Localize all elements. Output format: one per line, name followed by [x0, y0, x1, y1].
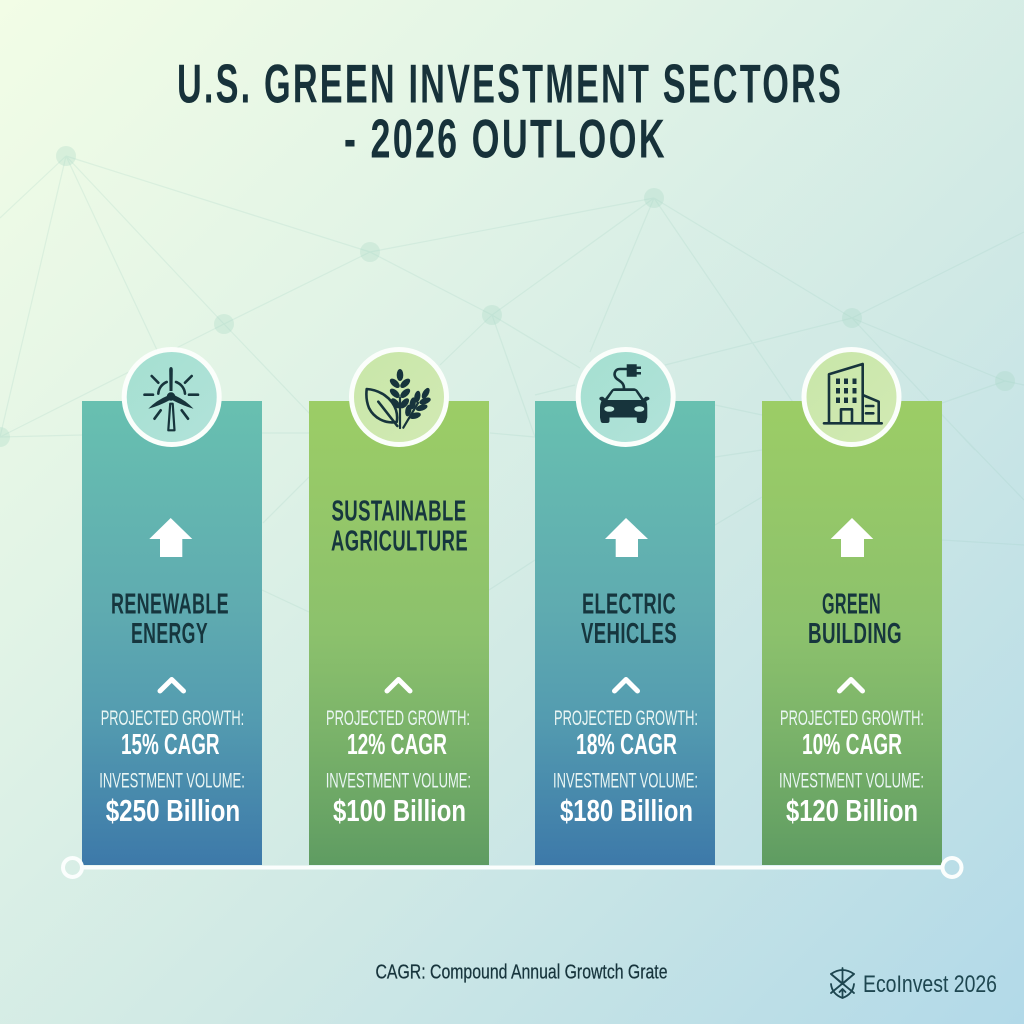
panel: renewable energy	[82, 350, 262, 865]
icon: wind turbine	[124, 350, 219, 444]
icon: brand mark	[831, 968, 854, 998]
chevron	[614, 680, 638, 691]
metrics: $100 Billion	[333, 793, 466, 828]
footnote: CAGR: Compound Annual Growtch Grate	[376, 962, 668, 984]
sector name	[808, 588, 902, 650]
metrics: PROJECTED GROWTH:	[554, 706, 698, 730]
sector name: GREEN	[822, 588, 881, 620]
metrics: PROJECTED GROWTH:	[780, 706, 924, 730]
metrics: 18% CAGR	[576, 729, 677, 761]
metrics	[326, 706, 471, 828]
sector name	[331, 496, 468, 558]
sector name: SUSTAINABLE	[332, 496, 466, 528]
metrics: INVESTMENT VOLUME:	[553, 768, 698, 792]
metrics: 10% CAGR	[802, 729, 902, 761]
panel: electric vehicles	[535, 350, 715, 865]
sector name	[581, 588, 677, 650]
metrics: INVESTMENT VOLUME:	[779, 768, 924, 792]
background network pattern	[0, 146, 1024, 612]
sector name: ENERGY	[131, 618, 208, 650]
metrics: PROJECTED GROWTH:	[101, 706, 244, 730]
sector name: BUILDING	[808, 618, 902, 650]
metrics	[99, 706, 245, 828]
metrics: 12% CAGR	[347, 729, 447, 761]
title: - 2026 OUTLOOK	[344, 108, 667, 170]
chevron	[160, 680, 184, 691]
arrow: up	[605, 518, 648, 557]
sector name: VEHICLES	[581, 618, 677, 650]
metrics: INVESTMENT VOLUME:	[99, 768, 245, 792]
arrow: up	[149, 518, 192, 557]
chevron	[840, 680, 862, 691]
sector name: ELECTRIC	[582, 588, 676, 620]
panel: sustainable agriculture	[309, 350, 489, 865]
metrics: INVESTMENT VOLUME:	[326, 768, 471, 792]
metrics	[779, 706, 924, 828]
chevron	[387, 680, 410, 691]
icon: electric car	[578, 350, 673, 444]
arrow: up	[831, 518, 873, 557]
metrics: 15% CAGR	[121, 729, 220, 761]
brand name: EcoInvest 2026	[863, 971, 997, 998]
timeline axis	[63, 858, 962, 877]
sector name: RENEWABLE	[111, 588, 229, 620]
sector name: AGRICULTURE	[331, 526, 468, 558]
metrics: $250 Billion	[106, 793, 240, 828]
title	[177, 52, 843, 170]
icon: leaf and wheat	[352, 350, 446, 444]
sector name	[111, 588, 229, 650]
metrics	[553, 706, 698, 828]
brand logo	[831, 968, 997, 998]
metrics: PROJECTED GROWTH:	[326, 706, 470, 730]
panel: green building	[762, 350, 942, 865]
metrics: $120 Billion	[786, 793, 918, 828]
metrics: $180 Billion	[560, 793, 693, 828]
icon: building	[804, 350, 899, 444]
